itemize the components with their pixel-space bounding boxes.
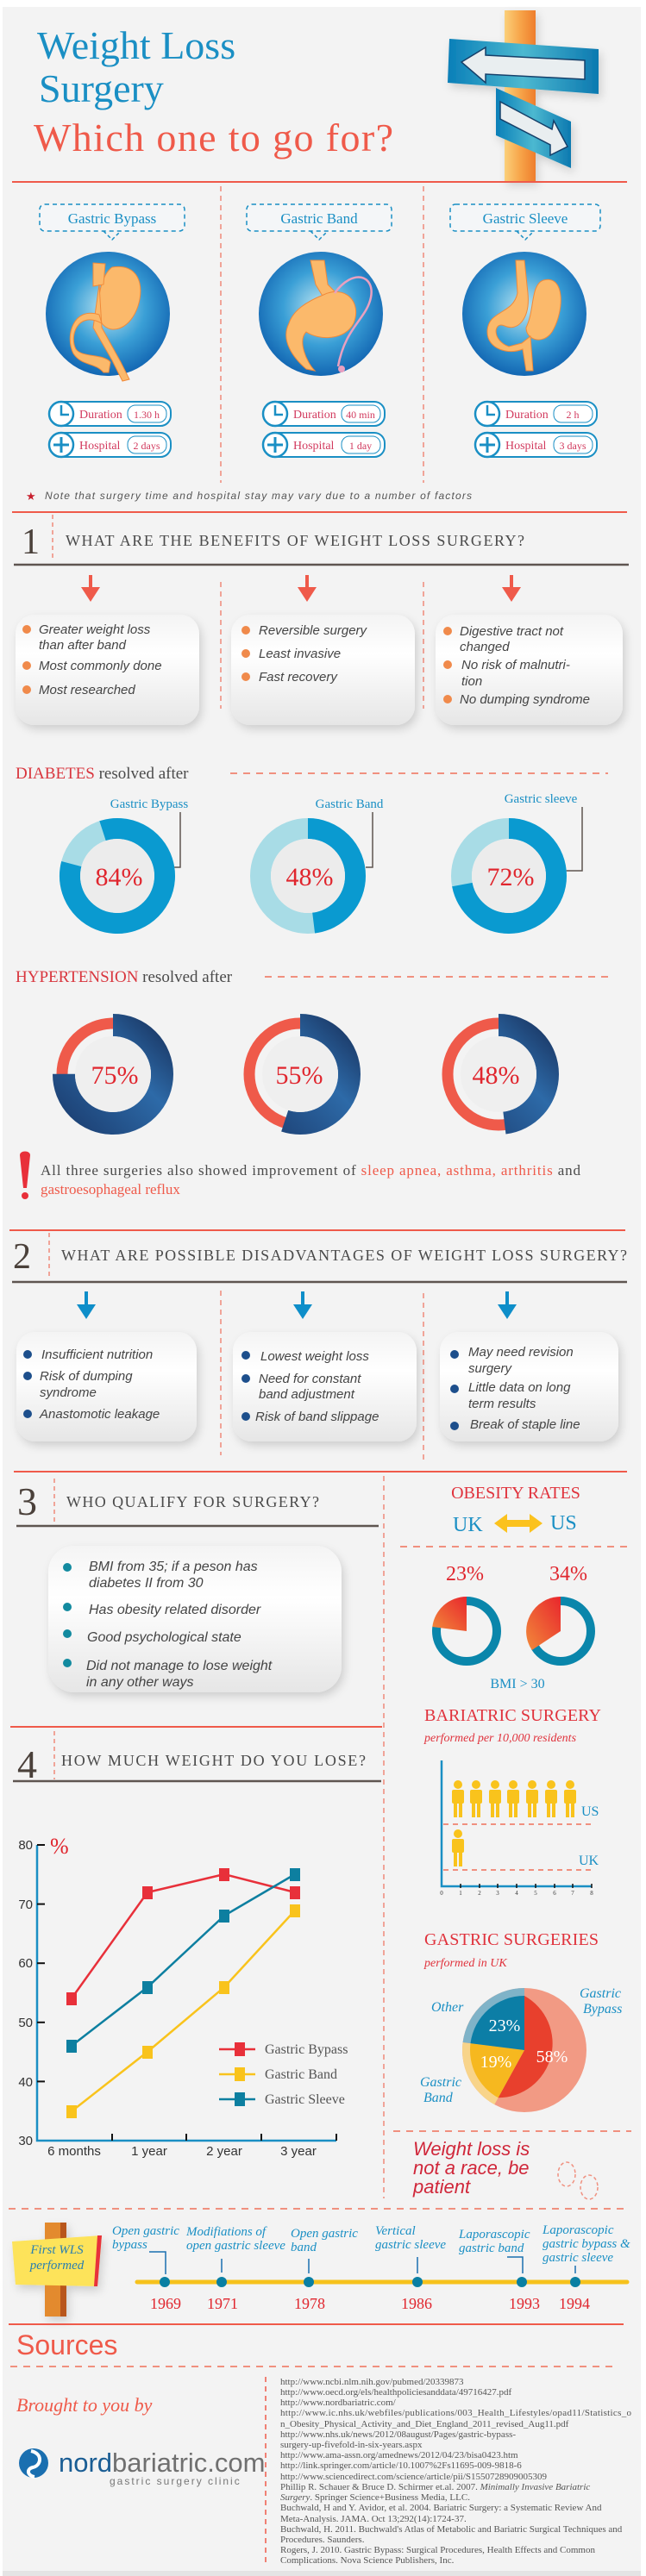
callout: weight loss is not a race: Weight loss is	[413, 2138, 530, 2160]
chart: hypertension sleeve 48%	[448, 1023, 549, 1125]
chart: diabetes sleeve 72%: Gastric sleeve	[505, 792, 578, 806]
chart: bariatric surgery pictogram: 5	[534, 1890, 537, 1897]
text: source list: http://www.ic.nhs.uk/webfiles/publications/003_Health_Lifestyles/opad11/Statistics_o	[280, 2408, 631, 2418]
legend	[219, 2042, 348, 2107]
title: Weight Loss	[37, 23, 235, 67]
timeline: bypass	[112, 2238, 147, 2252]
text: source list: Complications. Nova Science Publishers, Inc.	[280, 2555, 455, 2566]
heading: gastric surgeries	[423, 1930, 599, 1970]
panel: benefits band	[231, 615, 415, 725]
panel: disadvantages bypass: Risk of dumping	[40, 1369, 133, 1384]
chart: diabetes bypass 84%	[58, 797, 188, 935]
heading: section 1 benefits	[22, 515, 524, 562]
icon: first WLS signpost	[12, 2223, 102, 2317]
callout: weight loss is not a race	[412, 2138, 530, 2198]
timeline: Open gastric	[291, 2227, 358, 2241]
panel: disadvantages sleeve: surgery	[468, 1361, 513, 1376]
hospital pill	[475, 433, 597, 457]
label: gastric bypass: Gastric Bypass	[68, 210, 156, 227]
panel: benefits bypass: Greater weight loss	[39, 622, 151, 637]
timeline: 1978	[294, 2295, 325, 2312]
panel: disadvantages bypass: syndrome	[40, 1385, 97, 1400]
heading: section 4 weight loss	[17, 1731, 366, 1786]
panel: disadvantages band: Lowest weight loss	[260, 1349, 369, 1364]
note: Note that surgery time and hospital stay may vary due to a number of factors	[45, 490, 472, 502]
chart: weight loss line chart: %	[50, 1834, 69, 1859]
text: source list: Buchwald, H. 2011. Buchwald's Atlas of Metabolic and Bariatric Surgical Techniques and	[280, 2524, 623, 2535]
panel: disadvantages band: Risk of band slippage	[255, 1410, 379, 1424]
chart: gastric surgeries pie: 58%	[536, 2048, 568, 2066]
chart: diabetes band 48%	[260, 797, 384, 923]
hospital pill: Hospital	[293, 440, 335, 453]
timeline: 1969	[150, 2295, 181, 2312]
hospital pill	[263, 433, 385, 457]
panel: qualification criteria: diabetes II from 30	[89, 1576, 204, 1591]
chart: diabetes sleeve 72%	[461, 792, 582, 923]
panel: benefits bypass: than after band	[39, 638, 127, 653]
timeline: gastric bypass &	[543, 2237, 630, 2251]
timeline: Modifiations of	[185, 2225, 267, 2239]
chart: hypertension bypass 75%	[62, 1023, 164, 1125]
panel: gastric bypass	[40, 204, 185, 457]
panel: qualification criteria: Did not manage to lose weight	[86, 1659, 273, 1673]
chart: hypertension bypass 75%: 75%	[91, 1061, 138, 1090]
chart: US obesity 34%	[526, 1563, 591, 1661]
logo: nordbariatric: gastric surgery clinic	[110, 2475, 241, 2487]
text: source list: n_Obesity_Physical_Activity_and_Diet_England_2011_revised_Aug11.pdf	[280, 2419, 569, 2429]
duration pill	[475, 402, 597, 426]
heading: gastric surgeries: performed in UK	[423, 1957, 507, 1970]
timeline: 1993	[509, 2295, 540, 2312]
chart: bariatric surgery pictogram: 2	[478, 1890, 481, 1897]
legend: Gastric Bypass	[265, 2042, 348, 2057]
label: gastric band	[247, 204, 392, 240]
chart: weight loss line chart: 50	[18, 2016, 33, 2030]
heading: obesity rates: US	[550, 1512, 577, 1535]
heading: bariatric surgery: BARIATRIC SURGERY	[424, 1706, 601, 1725]
heading: section 1 benefits: 1	[22, 522, 40, 562]
panel: benefits band: Least invasive	[259, 647, 341, 661]
panel: disadvantages band: Need for constant	[259, 1372, 361, 1386]
chart: gastric surgeries pie	[420, 1986, 622, 2112]
timeline: band	[291, 2241, 317, 2254]
legend: Gastric Sleeve	[265, 2092, 345, 2107]
icon: footprints	[558, 2162, 598, 2199]
chart: bariatric surgery pictogram: US	[581, 1804, 599, 1819]
panel: benefits sleeve: tion	[461, 674, 482, 689]
chart: bariatric surgery pictogram	[440, 1760, 599, 1897]
panel: benefits bypass: Most commonly done	[39, 659, 162, 673]
icon: signpost	[448, 10, 599, 181]
title	[34, 23, 393, 159]
text: source list	[280, 2377, 631, 2566]
legend: Gastric Band	[265, 2067, 337, 2082]
timeline: 1994	[559, 2295, 590, 2312]
label: gastric sleeve: Gastric Sleeve	[483, 210, 568, 227]
chart: hypertension sleeve 48%: 48%	[473, 1061, 519, 1090]
chart: weight loss line chart	[18, 1834, 348, 2159]
title: Surgery	[39, 66, 164, 110]
chart: bariatric surgery pictogram: 3	[496, 1890, 499, 1897]
duration pill: 2 h	[566, 409, 580, 421]
heading: section 2 disadvantages: WHAT ARE POSSIBLE DISADVANTAGES OF WEIGHT LOSS SURGERY?	[61, 1247, 627, 1264]
panel: disadvantages bypass	[16, 1332, 197, 1441]
icon: band stomach	[259, 252, 383, 376]
arrows: red down	[81, 575, 521, 602]
chart: gastric surgeries pie: Gastric	[420, 2075, 461, 2090]
chart: bariatric surgery pictogram: UK	[579, 1854, 599, 1868]
chart: diabetes sleeve 72%: 72%	[486, 863, 535, 891]
panel: benefits sleeve: No dumping syndrome	[460, 692, 590, 707]
title: Which one to go for?	[34, 116, 393, 159]
hospital pill: Hospital	[505, 440, 547, 453]
panel: disadvantages sleeve: Break of staple line	[470, 1417, 580, 1432]
text: source list: http://www.ncbi.nlm.nih.gov/pubmed/20339873	[280, 2377, 464, 2387]
duration pill: Duration	[293, 409, 336, 422]
timeline: 1986	[401, 2295, 432, 2312]
chart: gastric surgeries pie: Band	[423, 2091, 454, 2105]
panel: disadvantages band	[233, 1332, 417, 1441]
panel: disadvantages sleeve: Little data on long	[468, 1380, 571, 1395]
duration pill: Duration	[505, 409, 549, 422]
callout: other improvements: All three surgeries also showed improvement of sleep apnea, asthma, arthritis and	[41, 1162, 581, 1179]
note: ★	[26, 490, 36, 503]
panel: benefits sleeve: Digestive tract not	[460, 624, 564, 639]
text: source list: http://www.nordbariatric.com/	[280, 2398, 397, 2408]
logo: nordbariatric: nordbariatric.com	[59, 2448, 265, 2478]
callout: other improvements	[20, 1152, 581, 1199]
icon: first WLS signpost: performed	[29, 2259, 85, 2273]
timeline: Open gastric	[112, 2224, 179, 2238]
icon: bypass stomach	[46, 252, 170, 381]
text: source list: Meta-Analysis. JAMA. Oct 13;292(14):1724-37.	[280, 2514, 467, 2524]
heading: sources: Sources	[16, 2329, 117, 2360]
heading: section 4 weight loss: HOW MUCH WEIGHT DO YOU LOSE?	[61, 1752, 366, 1769]
chart: bariatric surgery pictogram: 0	[440, 1890, 443, 1897]
text: BMI > 30: BMI > 30	[490, 1677, 545, 1691]
heading: section 3 qualify: WHO QUALIFY FOR SURGERY?	[66, 1493, 319, 1510]
heading: bariatric surgery	[423, 1706, 601, 1745]
chart: UK obesity 23%	[432, 1563, 497, 1661]
duration pill	[49, 402, 171, 426]
heading: obesity rates: UK	[453, 1514, 483, 1536]
hospital pill: Hospital	[79, 440, 121, 453]
timeline: gastric sleeve	[375, 2238, 446, 2252]
timeline: 1971	[207, 2295, 238, 2312]
timeline: open gastric sleeve	[186, 2239, 285, 2253]
chart: weight loss line chart: 80	[18, 1838, 33, 1853]
heading: section 4 weight loss: 4	[17, 1742, 37, 1786]
panel: benefits sleeve: changed	[460, 640, 510, 654]
heading: obesity rates	[451, 1484, 580, 1536]
text: source list: Procedures. Saunders.	[280, 2535, 365, 2545]
panel: gastric sleeve	[450, 204, 600, 457]
duration pill: 40 min	[346, 409, 375, 421]
panel: benefits band: Fast recovery	[259, 670, 338, 685]
chart: diabetes bypass 84%: 84%	[95, 863, 143, 891]
heading: section 2 disadvantages	[13, 1233, 627, 1278]
chart: weight loss line chart: 30	[18, 2134, 33, 2148]
panel: benefits sleeve	[436, 615, 623, 725]
timeline: Laporascopic	[458, 2228, 530, 2241]
hospital pill: 1 day	[349, 440, 372, 452]
heading: section 1 benefits: WHAT ARE THE BENEFITS OF WEIGHT LOSS SURGERY?	[66, 532, 524, 549]
chart: UK obesity 23%: 23%	[446, 1563, 484, 1585]
chart: diabetes band 48%: Gastric Band	[316, 797, 384, 811]
chart: weight loss line chart: 6 months	[47, 2144, 101, 2159]
chart: diabetes bypass 84%: Gastric Bypass	[110, 797, 188, 811]
chart: diabetes band 48%: 48%	[286, 863, 333, 891]
callout: other improvements: gastroesophageal reflux	[41, 1181, 180, 1197]
timeline	[112, 2223, 630, 2312]
arrows: blue down	[77, 1291, 517, 1319]
chart: weight loss line chart: 3 year	[280, 2144, 317, 2159]
heading: diabetes: DIABETES resolved after	[16, 765, 189, 783]
text: source list: http://www.ama-assn.org/amednews/2012/04/23/bisa0423.htm	[280, 2450, 518, 2460]
label: gastric sleeve	[450, 204, 600, 240]
heading: section 3 qualify: 3	[17, 1479, 37, 1523]
text: source list: http://www.oecd.org/els/healthpoliciesanddata/49716427.pdf	[280, 2387, 512, 2398]
chart: hypertension band 55%: 55%	[276, 1061, 323, 1090]
callout: weight loss is not a race: not a race, be	[413, 2157, 530, 2179]
logo: nordbariatric	[19, 2448, 265, 2487]
panel: gastric band	[247, 204, 392, 457]
hospital pill: 3 days	[559, 440, 586, 452]
chart: bariatric surgery pictogram: 6	[553, 1890, 556, 1897]
text: brought to you by: Brought to you by	[16, 2394, 153, 2416]
heading: section 3 qualify	[17, 1479, 319, 1523]
panel: disadvantages bypass: Insufficient nutrition	[41, 1347, 153, 1362]
chart: gastric surgeries pie: 23%	[489, 2016, 520, 2035]
heading: hypertension: HYPERTENSION resolved after	[16, 968, 233, 986]
icon: first WLS signpost: First WLS	[29, 2243, 84, 2257]
text: source list: Rogers, J. 2010. Gastric Bypass: Surgical Procedures, Health Effects and Common	[280, 2545, 595, 2555]
label: gastric band: Gastric Band	[280, 210, 358, 227]
chart: gastric surgeries pie: 19%	[480, 2053, 511, 2072]
panel: qualification criteria	[48, 1546, 342, 1692]
hospital pill	[49, 433, 171, 457]
label: gastric bypass	[40, 204, 185, 240]
text: source list: Surgery. Springer Science+Business Media, LLC.	[280, 2492, 470, 2503]
timeline: gastric sleeve	[543, 2251, 613, 2265]
hospital pill: 2 days	[133, 440, 160, 452]
text: source list: Buchwald, H and Y. Avidor, et al. 2004. Bariatric Surgery: a Systematic Review And	[280, 2503, 602, 2513]
chart: weight loss line chart: 70	[18, 1898, 33, 1912]
panel: benefits bypass	[16, 615, 199, 725]
panel: qualification criteria: BMI from 35; if a peson has	[89, 1560, 258, 1574]
text: source list: http://www.sciencedirect.com/science/article/pii/S1550728909005309	[280, 2472, 548, 2482]
panel: disadvantages sleeve: term results	[468, 1397, 536, 1411]
chart: bariatric surgery pictogram: 4	[515, 1890, 518, 1897]
chart: bariatric surgery pictogram: 8	[590, 1890, 593, 1897]
callout: weight loss is not a race: patient	[412, 2176, 471, 2198]
panel: qualification criteria: Good psychological state	[87, 1630, 241, 1645]
text: source list: Phillip R. Schauer & Bruce D. Schirmer et.al. 2007. Minimally Invasive Bariatric	[280, 2482, 590, 2492]
duration pill: 1.30 h	[134, 409, 160, 421]
heading: obesity rates: OBESITY RATES	[451, 1484, 580, 1503]
timeline: gastric band	[459, 2241, 524, 2255]
heading: section 2 disadvantages: 2	[13, 1237, 31, 1277]
text: source list: http://link.springer.com/article/10.1007%2Fs11695-009-9818-6	[280, 2460, 522, 2471]
panel: benefits bypass: Most researched	[39, 683, 135, 697]
chart: gastric surgeries pie: Bypass	[583, 2002, 622, 2016]
chart: weight loss line chart: 60	[18, 1956, 33, 1971]
chart: weight loss line chart: 2 year	[206, 2144, 242, 2159]
heading: bariatric surgery: performed per 10,000 residents	[423, 1732, 577, 1745]
chart: gastric surgeries pie: Other	[431, 2000, 464, 2015]
panel: disadvantages bypass: Anastomotic leakage	[39, 1407, 160, 1422]
panel: disadvantages sleeve: May need revision	[468, 1345, 574, 1360]
duration pill: Duration	[79, 409, 122, 422]
panel: qualification criteria: in any other ways	[86, 1675, 194, 1690]
chart: weight loss line chart: 40	[18, 2075, 33, 2090]
panel: qualification criteria: Has obesity related disorder	[89, 1603, 261, 1617]
timeline: Laporascopic	[542, 2223, 614, 2237]
chart: gastric surgeries pie: Gastric	[580, 1986, 621, 2001]
chart: weight loss line chart: 1 year	[131, 2144, 167, 2159]
text: source list: surgery-up-fivefold-in-six-years.aspx	[280, 2440, 423, 2450]
chart: bariatric surgery pictogram: 1	[459, 1890, 462, 1897]
panel: benefits sleeve: No risk of malnutri-	[461, 658, 570, 672]
text: source list: http://www.nhs.uk/news/2012/08august/Pages/gastric-bypass-	[280, 2429, 516, 2440]
panel: disadvantages sleeve	[440, 1332, 618, 1441]
timeline: Vertical	[375, 2224, 416, 2238]
icon: sleeve stomach	[462, 252, 586, 376]
chart: hypertension band 55%	[249, 1023, 351, 1125]
chart: US obesity 34%: 34%	[549, 1563, 587, 1585]
panel: benefits band: Reversible surgery	[259, 623, 368, 638]
duration pill	[263, 402, 385, 426]
panel: disadvantages band: band adjustment	[259, 1387, 355, 1402]
chart: bariatric surgery pictogram: 7	[571, 1890, 574, 1897]
heading: gastric surgeries: GASTRIC SURGERIES	[424, 1930, 599, 1949]
